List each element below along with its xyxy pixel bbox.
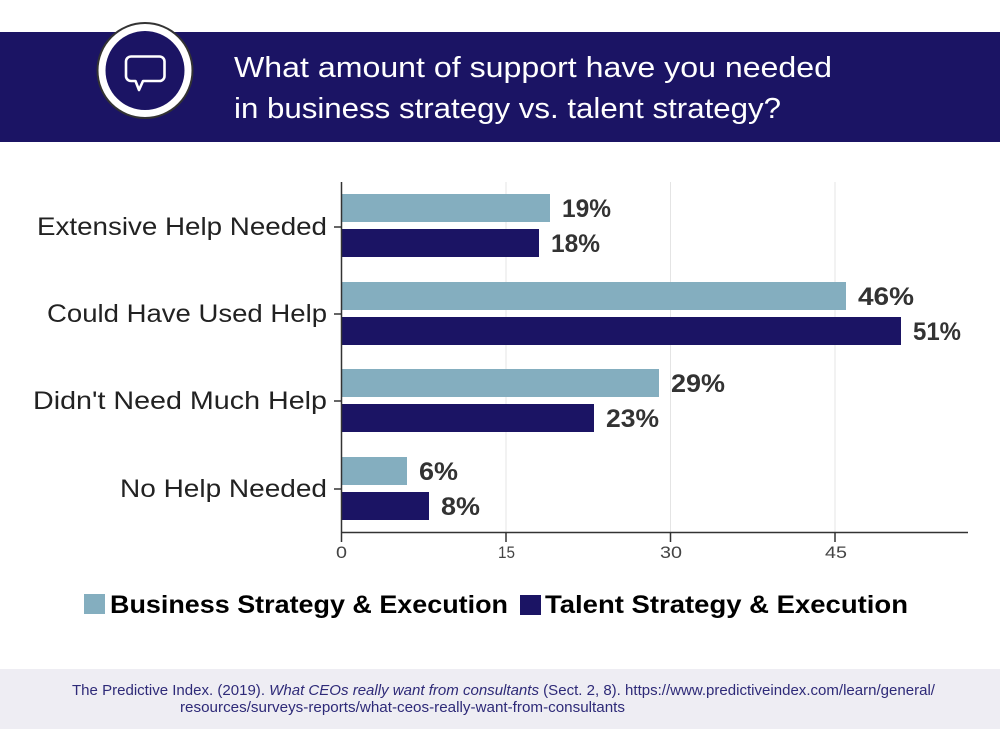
bars: business strategy bbox=[341, 194, 846, 485]
x-axis tick labels: 45 bbox=[825, 543, 847, 562]
x-axis tick labels: 0 bbox=[336, 543, 347, 562]
x-axis tick labels: 15 bbox=[498, 543, 515, 562]
category labels bbox=[33, 213, 327, 503]
value labels: 6% bbox=[419, 458, 458, 486]
legend: business strategy: Business Strategy & Execution bbox=[110, 591, 508, 619]
citation text bbox=[72, 683, 936, 716]
category labels: Could Have Used Help bbox=[47, 300, 327, 328]
value labels: 46% bbox=[858, 283, 914, 311]
title bbox=[234, 52, 832, 125]
legend: talent strategy: Talent Strategy & Execution bbox=[545, 591, 908, 619]
icon: speech bubble in circle bbox=[96, 22, 194, 119]
legend bbox=[84, 591, 908, 619]
x-axis tick labels: 30 bbox=[660, 543, 682, 562]
title: in business strategy vs. talent strategy? bbox=[234, 93, 781, 125]
value labels bbox=[419, 195, 961, 521]
category labels: Didn't Need Much Help bbox=[33, 387, 327, 415]
value labels: 51% bbox=[913, 318, 961, 346]
title: What amount of support have you needed bbox=[234, 52, 832, 84]
bar chart bbox=[33, 182, 968, 562]
value labels: 8% bbox=[441, 493, 480, 521]
bars: talent strategy bbox=[341, 229, 901, 520]
header banner bbox=[0, 22, 1000, 142]
axes bbox=[334, 182, 968, 542]
source footer bbox=[0, 669, 1000, 729]
category labels: Extensive Help Needed bbox=[37, 213, 327, 241]
value labels: 23% bbox=[606, 405, 659, 433]
value labels: 19% bbox=[562, 195, 611, 223]
category labels: No Help Needed bbox=[120, 475, 327, 503]
value labels: 18% bbox=[551, 230, 600, 258]
x-axis tick labels bbox=[336, 543, 847, 562]
value labels: 29% bbox=[671, 370, 725, 398]
citation text: resources/surveys-reports/what-ceos-really-want-from-consultants bbox=[180, 700, 625, 716]
citation text: The Predictive Index. (2019). What CEOs really want from consultants (Sect. 2, 8). https://www.predictiveindex.com/learn/general/ bbox=[72, 683, 936, 699]
